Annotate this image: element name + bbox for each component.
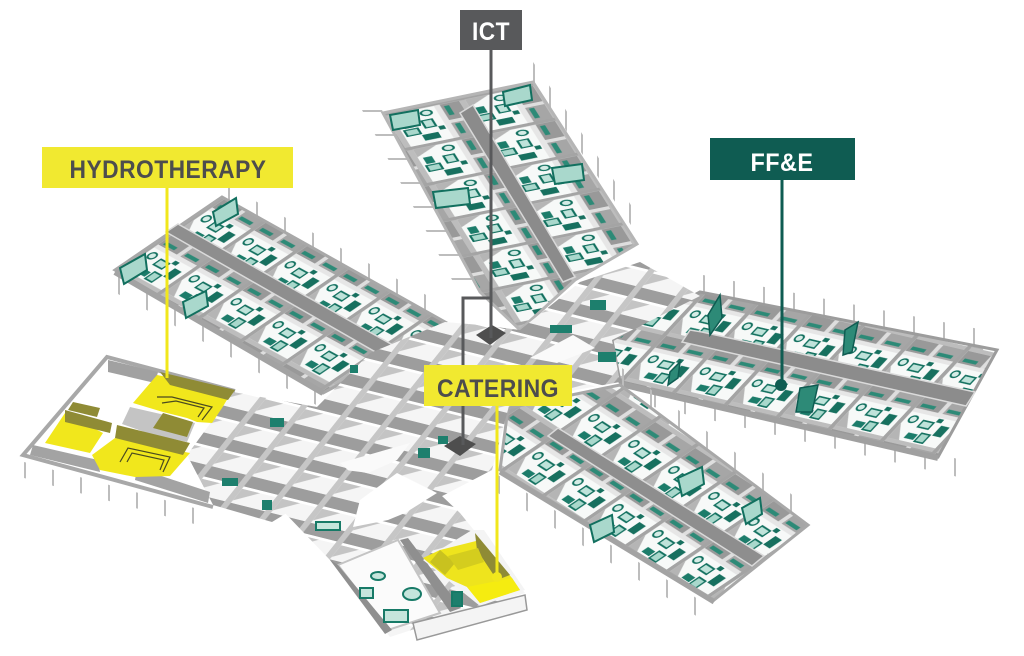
kitchen white floor — [423, 530, 525, 606]
lounge furniture — [316, 522, 462, 622]
label: FF&E — [710, 138, 855, 180]
south block: lounge and kitchen — [282, 470, 527, 640]
south-east corridor — [548, 428, 764, 566]
wing: south-east ward — [498, 377, 810, 615]
bottom walls — [30, 445, 100, 472]
wing: east ward — [612, 284, 999, 471]
fence posts — [24, 470, 214, 521]
hydrotherapy leader line — [166, 188, 168, 378]
lounge floor — [338, 540, 440, 630]
hydrotherapy block — [23, 357, 235, 521]
label: FF&E: FF&E — [750, 149, 814, 177]
north corridor — [460, 105, 575, 282]
ICT floor plates — [444, 325, 506, 456]
west shelving — [120, 198, 238, 318]
core furniture — [222, 300, 616, 510]
ICT leader line — [463, 50, 491, 445]
open courtyard — [353, 473, 437, 527]
north shelving — [390, 85, 584, 208]
catering leader line — [492, 406, 502, 582]
yellow pool halls — [133, 375, 233, 423]
central core — [187, 262, 700, 522]
label: HYDROTHERAPY: HYDROTHERAPY — [70, 156, 266, 184]
inner service rooms — [122, 407, 195, 442]
olive walls — [160, 372, 235, 400]
east corridor — [682, 330, 975, 406]
south west wall — [330, 560, 392, 634]
inner north wall — [108, 360, 158, 383]
label: HYDROTHERAPY — [42, 147, 293, 188]
wing: west ward — [115, 195, 445, 403]
lounge east wall — [400, 538, 461, 612]
core open floors — [340, 443, 410, 478]
east outer wall — [620, 384, 938, 458]
label: CATERING — [424, 365, 572, 406]
west corridor — [166, 224, 398, 358]
south-east outer wall — [500, 472, 714, 602]
label: ICT — [460, 10, 522, 50]
east shelving — [668, 295, 858, 412]
pool outlines — [120, 397, 212, 472]
FF&E leader line — [775, 180, 787, 391]
label: CATERING: CATERING — [437, 375, 559, 403]
catering kitchen highlight — [423, 533, 520, 603]
south-east shelving — [590, 467, 762, 542]
south front wall — [413, 595, 527, 640]
west outer wall — [115, 272, 323, 393]
label: ICT: ICT — [472, 18, 510, 46]
wing: north ward — [372, 72, 643, 330]
